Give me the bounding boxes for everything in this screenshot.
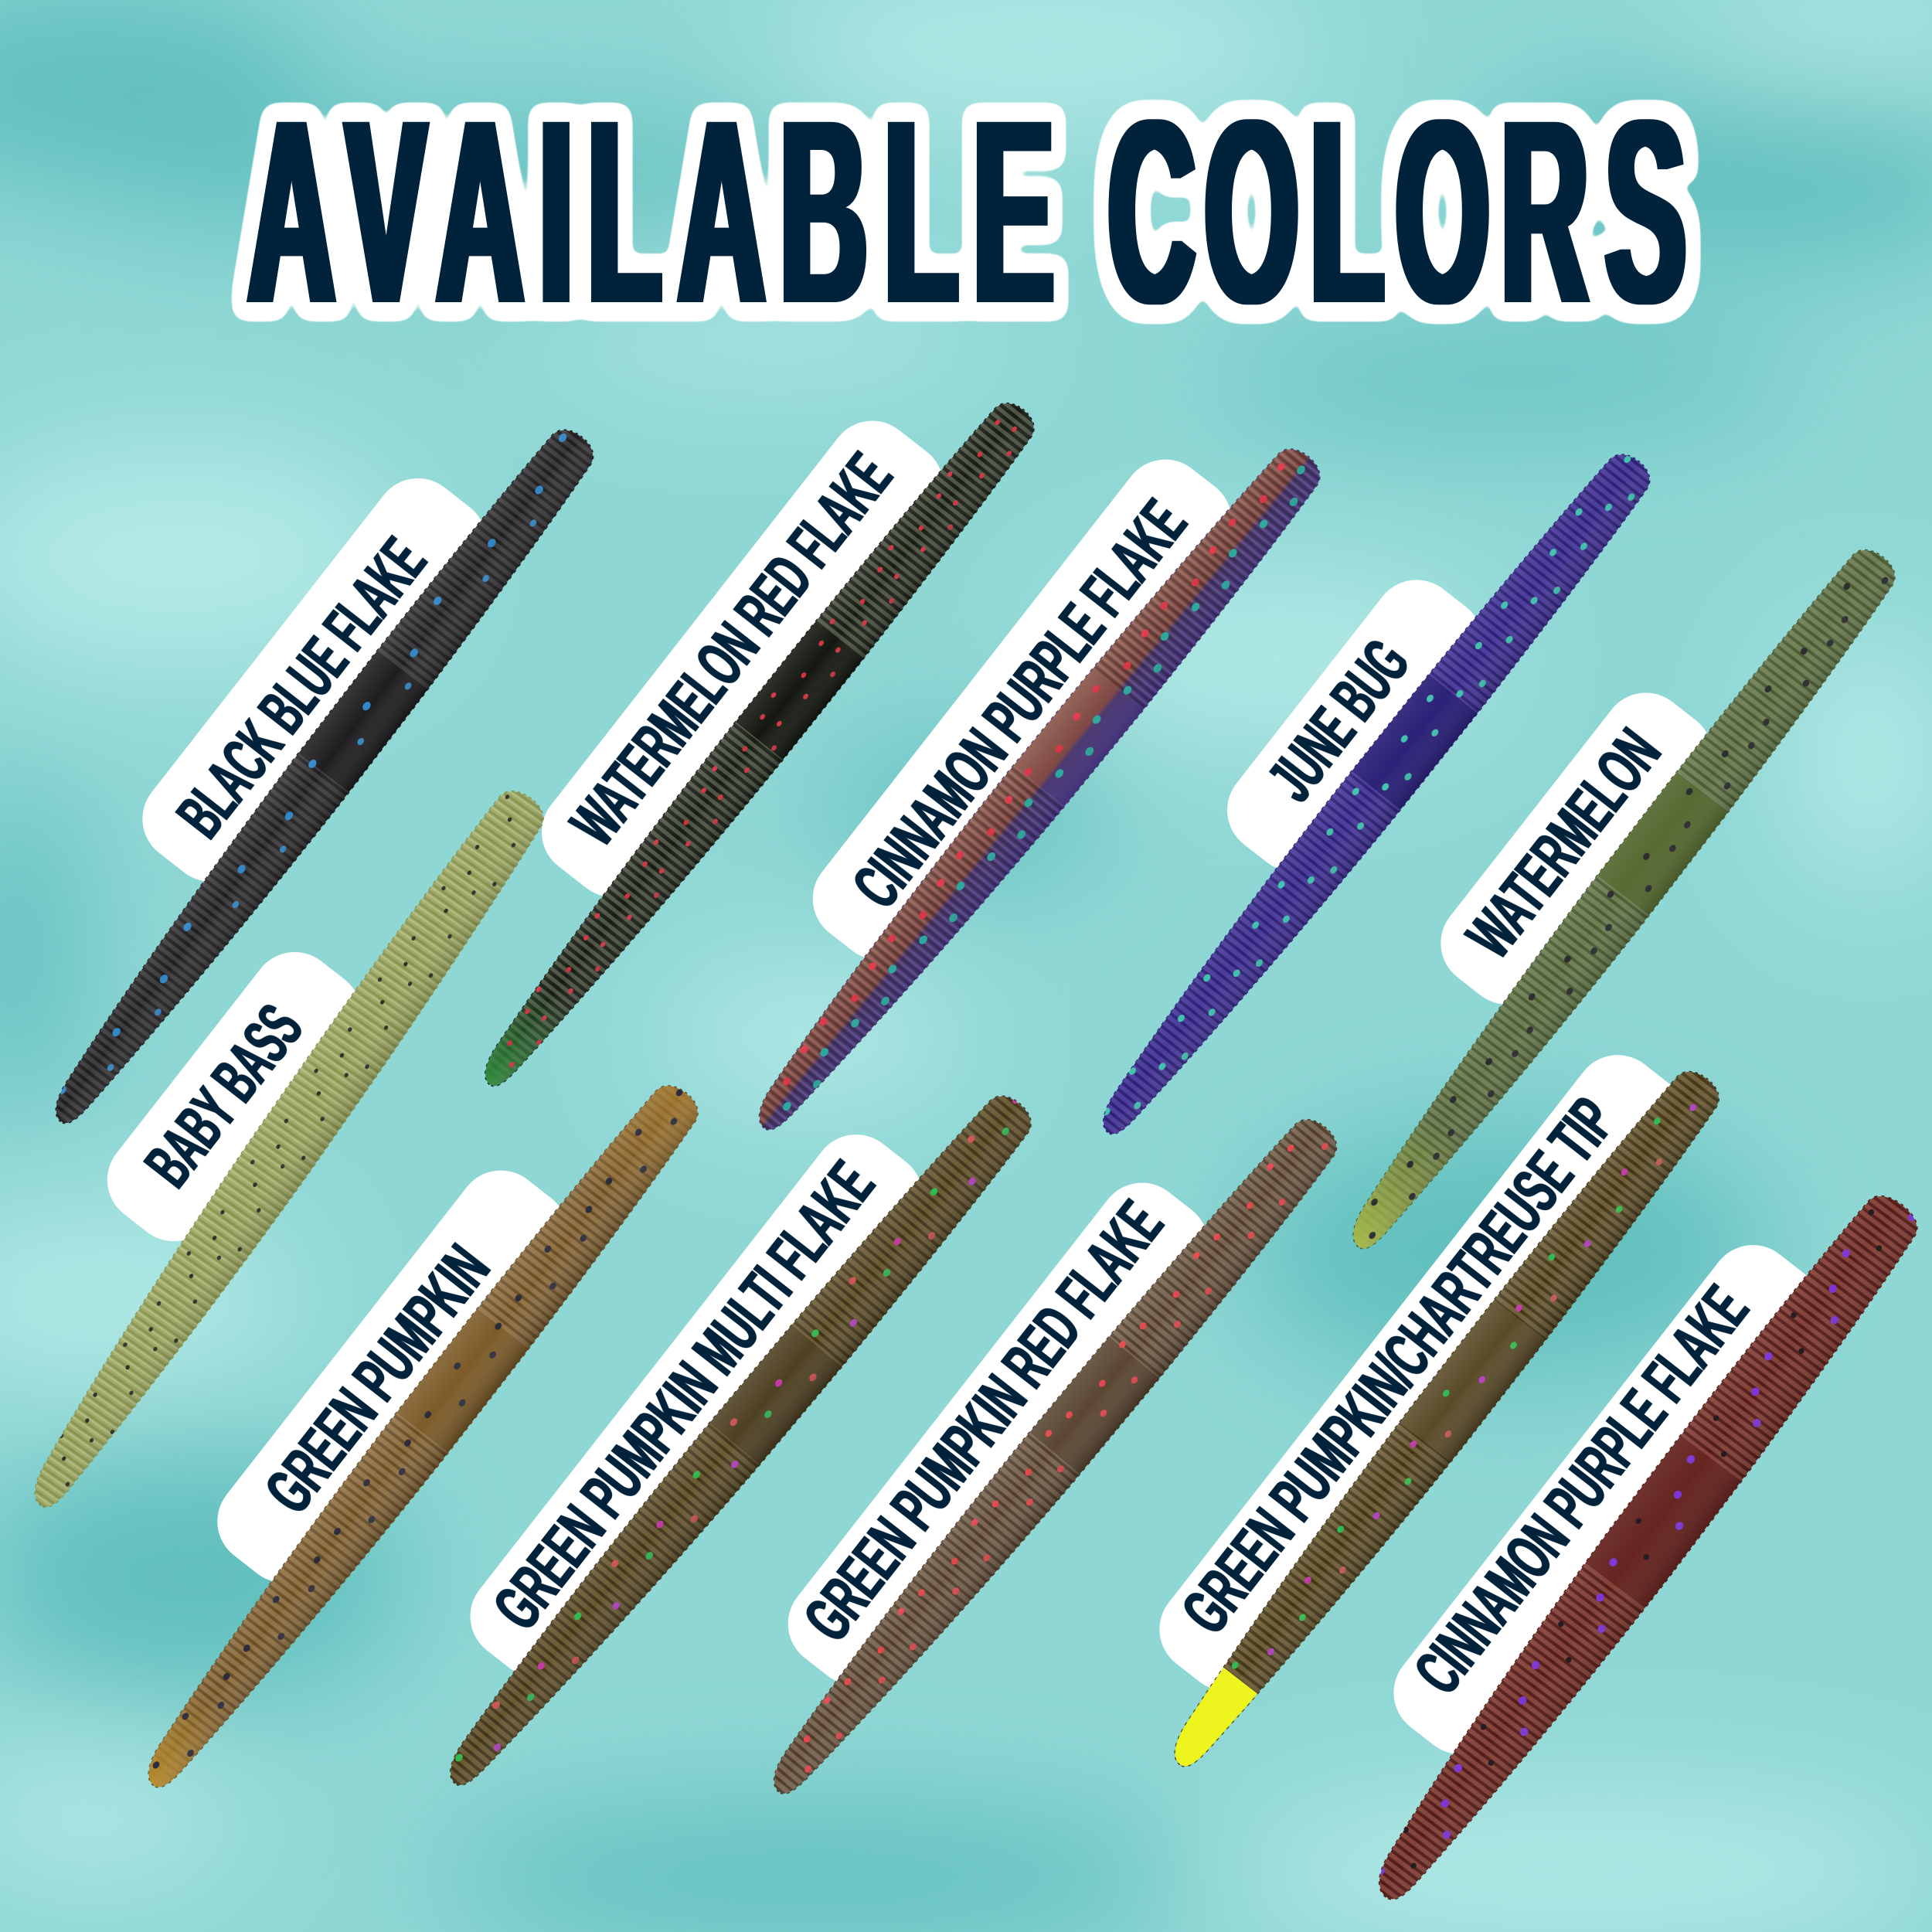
label: green pumpkin/chartreuse tip: GREEN PUMPKIN/CHARTREUSE TIP — [1168, 1085, 1630, 1647]
label: black blue flake: BLACK BLUE FLAKE — [163, 525, 440, 851]
label: june bug: JUNE BUG — [1254, 627, 1423, 814]
label: baby bass: BABY BASS — [131, 992, 317, 1200]
label: watermelon red flake — [524, 403, 961, 914]
label: watermelon — [1423, 675, 1730, 1022]
label: black blue flake — [125, 461, 504, 899]
worm: green pumpkin — [148, 1085, 699, 1788]
title: AVAILABLE COLORS: AVAILABLE COLORS — [248, 65, 1686, 358]
title: AVAILABLE COLORS: AVAILABLE COLORS — [248, 65, 1686, 358]
worm: green pumpkin multi flake — [421, 1077, 1051, 1808]
worm: black blue flake — [56, 429, 594, 1124]
label: green pumpkin/chartreuse tip — [1141, 1036, 1702, 1708]
label: green pumpkin — [200, 1153, 585, 1600]
worm: cinnamon purple flake top — [730, 430, 1340, 1151]
worm: baby bass — [34, 791, 544, 1509]
label: watermelon: WATERMELON — [1453, 716, 1675, 971]
worm: green pumpkin chartreuse tip — [1145, 1053, 1739, 1787]
worm: cinnamon purple flake bottom — [1346, 1175, 1932, 1923]
label: watermelon red flake: WATERMELON RED FLAKE — [556, 440, 906, 859]
label: green pumpkin red flake — [770, 1165, 1226, 1702]
label: baby bass — [90, 934, 379, 1259]
label: cinnamon purple flake bottom — [1372, 1225, 1837, 1771]
label: june bug — [1209, 563, 1501, 889]
label: green pumpkin multi flake — [453, 1117, 940, 1695]
label: green pumpkin multi flake: GREEN PUMPKIN MULTI FLAKE — [480, 1148, 889, 1643]
label: green pumpkin: GREEN PUMPKIN — [251, 1232, 504, 1526]
label: cinnamon purple flake top — [795, 442, 1249, 978]
worm: june bug — [1075, 436, 1669, 1155]
worm: watermelon red flake — [485, 402, 1035, 1087]
label: green pumpkin red flake: GREEN PUMPKIN RED FLAKE — [790, 1188, 1177, 1655]
label: cinnamon purple flake top: CINNAMON PURPLE FLAKE — [839, 487, 1201, 921]
worm: watermelon — [1324, 531, 1915, 1270]
worm: green pumpkin red flake — [745, 1100, 1356, 1815]
